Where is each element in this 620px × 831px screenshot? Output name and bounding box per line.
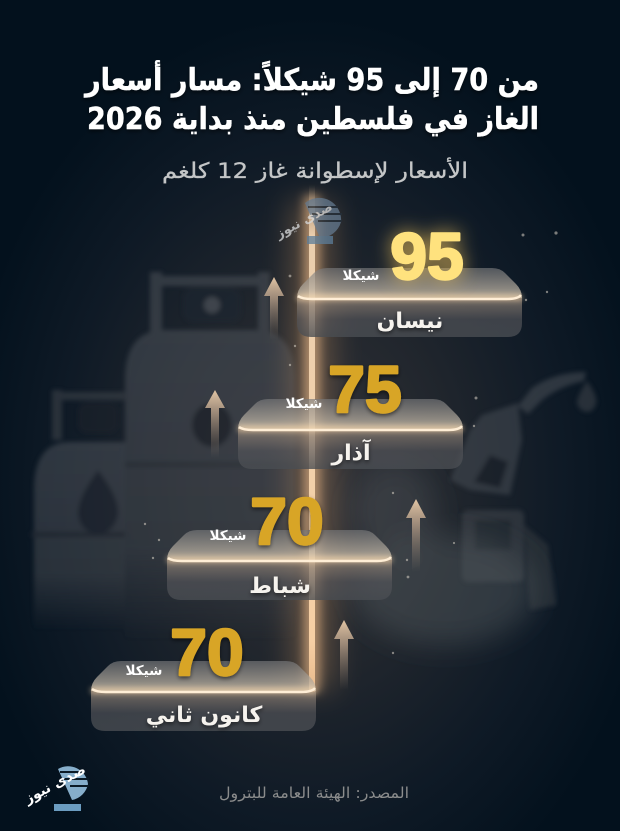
step: January [91, 615, 316, 731]
value: 70: 70 [170, 615, 244, 689]
value: 95: 95 [390, 219, 464, 293]
arrow 4 [334, 620, 354, 690]
source: المصدر: الهيئة العامة للبترول [219, 784, 409, 802]
unit: شيكلا [343, 268, 379, 284]
month: آذار [330, 438, 371, 466]
month: شباط [249, 574, 311, 599]
logo: bottom left: صدى نيوز [21, 762, 89, 808]
step: April [297, 219, 522, 337]
step platform [167, 530, 392, 600]
title [83, 60, 539, 137]
illustration: gas cylinders [31, 272, 298, 640]
month: كانون ثاني [146, 703, 262, 728]
subtitle: الأسعار لإسطوانة غاز 12 كلغم [162, 157, 468, 184]
illustration: fuel nozzle and can [450, 372, 596, 610]
arrow 1 [264, 277, 284, 340]
central glowing line [290, 185, 334, 692]
sparkles [144, 231, 558, 654]
large cylinder [122, 272, 298, 640]
step: February [167, 484, 392, 600]
arrow 3 [406, 499, 426, 572]
value: 70: 70 [250, 484, 324, 558]
unit: شيكلا [286, 396, 322, 412]
small cylinder [31, 390, 127, 630]
step platform [91, 661, 316, 731]
step platform [297, 268, 522, 337]
unit: شيكلا [126, 663, 162, 679]
title: الغاز في فلسطين منذ بداية 2026 [87, 102, 539, 137]
step platform [238, 399, 463, 469]
unit: شيكلا [210, 528, 246, 544]
title: من 70 إلى 95 شيكلاً: مسار أسعار [83, 60, 539, 98]
logo: top watermark: صدى نيوز [272, 200, 335, 243]
step: March [238, 352, 463, 469]
month: نيسان [377, 309, 443, 334]
value: 75: 75 [328, 352, 402, 426]
illustration: smoke haze [353, 462, 537, 645]
arrow 2 [205, 390, 225, 458]
rising arrows [205, 277, 426, 690]
